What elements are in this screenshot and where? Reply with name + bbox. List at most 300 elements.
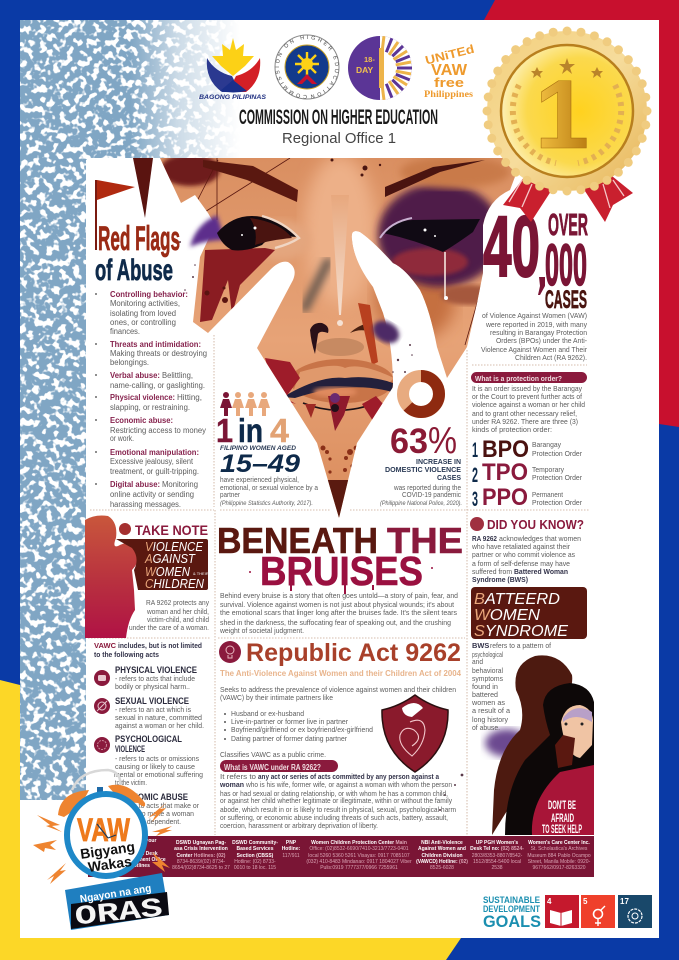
badge: VAW Bigyang Wakas clock: Wakas [87,853,133,875]
item: physical violence: PHYSICAL VIOLENCE [115,665,197,676]
hotline: report: Women's Desk [122,851,158,857]
logo: CHED seal: COMMISSION ON HIGHER EDUCATION [275,35,339,99]
banner: violence against women and children: AGAINST [144,552,196,566]
clock face [67,794,145,876]
hotline: NBI: NBI Anti-Violence [421,840,463,846]
laurel [513,85,621,163]
stat: 63% increase: % [428,420,457,462]
hotline: DSWD Community: DSWD Community- [232,840,278,846]
SDG 5 tile [581,895,615,928]
list of abuse types: name-calling, or gaslighting. [110,381,205,390]
badge: VAW Bigyang Wakas clock [33,770,172,933]
logo: 18-day campaign: DAY [356,65,373,75]
subheading: Regional Office 1 [282,130,396,147]
panel: Republic Act 9262: Classifies VAWC as a public crime. [220,750,326,759]
logo: United for VAW-free Philippines: Philippines [424,89,474,99]
icon: did you know [470,517,484,531]
intro paragraph: weight of societal judgment. [219,626,304,635]
item: psychological violence: PSYCHOLOGICAL [115,734,182,745]
hotline: UP PGH: 2803/8353-8807/8542- [472,853,523,859]
panel: Republic Act 9262: (VAWC) by their intimate partners like [220,693,333,702]
Ngayon na ang ORAS box: ORAS [74,894,164,933]
section: Red Flags of Abuse [95,158,207,509]
lip drips and blood [305,404,316,418]
logo: Bagong Pilipinas [199,38,267,101]
stat: 63% increase: INCREASE IN [416,457,461,466]
panel: what is a protection order: kinds of protection order: [472,425,552,434]
stat: over 40,000 cases [481,199,588,362]
panel: did you know: acknowledges that women [499,534,581,543]
panel: did you know [470,517,594,836]
left eyebrow [203,160,298,202]
order types: TPO [482,459,528,486]
lips [290,359,394,403]
hotline: Women's Care Center: Museum 884 Pablo Ocampo [527,853,591,859]
panel: Republic Act 9262: Seeks to address the prevalence of violence against women and their children [220,685,456,694]
stat: over 40,000 cases: Violence Against Women and Their [481,345,587,354]
list of abuse types: Digital abuse: [110,480,160,489]
organisation heading: COMMISSION ON HIGHER EDUCATION [239,106,438,129]
BWS wrapped text: found in [472,682,498,691]
scratches [190,158,478,345]
list of abuse types: Hitting, [177,393,202,402]
list of abuse types: ones, or controlling [110,318,176,327]
chin triangle [328,480,348,518]
hotline: DSWD Ugnayan: Center Hotlines: (02) [177,853,226,859]
stat: 63% increase: was reported during the [393,483,461,492]
hotline: DSWD Community: 0010 to 18 loc. 115 [234,865,276,871]
panel: take note VAWC: RA 9262 protects any [146,598,209,607]
clock bells [58,785,145,817]
logo: 18-day campaign [348,36,412,100]
logo: United for VAW-free Philippines [424,42,476,99]
item: psychological violence: VIOLENCE [115,744,145,755]
Ngayon na ang ORAS box: Ngayon na ang [79,882,152,906]
callout: don't be afraid: AFRAID [551,811,574,825]
list of abuse types: treatment, or guilt-tripping. [110,467,199,476]
order types: PPO [482,484,528,511]
list of partners: Husband or ex-husband [231,709,304,718]
item: physical violence: bodily or physical harm.. [115,682,190,691]
item: sexual violence: sexual in nature, committed [115,713,202,722]
order types [472,436,582,511]
partner logos row [199,34,476,101]
order types: BPO [482,436,529,463]
text: OVER [548,207,588,242]
list of abuse types: Monitoring [162,480,198,489]
hotline: DSWD Community: Section (CBSS) [237,853,274,859]
panel: take note VAWC [85,516,209,638]
SDG 17 tile: 17 [620,897,629,906]
list of abuse types: online activity or sending [110,490,194,499]
BWS wrapped text: BWS [472,641,489,650]
intro paragraph [219,591,458,635]
item: economic abuse: financially dependent. [115,817,181,826]
SDG 5 tile: 5 [583,897,588,906]
panel: acts of violence [94,641,204,826]
BWS wrapped text: behavioral [472,666,503,675]
item: psychological violence: causing or likely to cause [115,762,195,771]
badge: VAW Bigyang Wakas clock: VAW [77,812,131,848]
stat: 1 in 4 women: have experienced physical, [220,475,299,484]
item: economic abuse: - refers to acts that make or [115,801,199,810]
panel: what is a protection order [471,372,587,511]
intro paragraph: survival. Violence against women is not just about physical wounds; it's about [220,600,454,609]
text: 000 [545,233,587,298]
bruise beside nose [305,262,328,308]
badge: VAW Bigyang Wakas clock: Bigyang [79,838,136,862]
BWS wrapped text: symptoms [472,674,503,683]
hotline: NBI [416,840,468,871]
intro paragraph: the emotional scars that linger long after the bruises fade. It's the silent tears [220,608,457,617]
list of abuse types: Belittling, [162,371,193,380]
hotline: PNP: Hotline: [282,846,301,852]
item: sexual violence: SEXUAL VIOLENCE [115,696,189,707]
stat: 1 in 4 women: (Philippine Statistics Authority, 2017). [220,501,313,507]
BWS wrapped text: a result of a [472,706,511,715]
panel: what is a protection order: under RA 9262. There are three (3) [472,417,578,426]
hotline: Women's Care Center: St. Scholastica's Archives [531,846,588,852]
stat: over 40,000 cases: Children Act (RA 9262). [515,353,587,362]
list of partners: Dating partner of former dating partner [231,734,347,743]
stat: 63% increase: COVID-19 pandemic [402,490,461,499]
list of abuse types: Controlling behavior: [110,290,188,299]
list of partners: Live-in-partner or former live in partner [231,717,348,726]
list of abuse types: harassing messages. [110,500,181,509]
list of abuse types: belongings. [110,358,149,367]
Ngayon na ang ORAS box [65,873,169,933]
hotline: DSWD Community [232,840,278,871]
nostrils [310,323,328,354]
hotline: Women's Care Center: 9677662/0917-8263320 [532,865,586,871]
hotline: Women Children Protection Center: local 5260 5360 5261 Visayas: 0917 7085107 [308,853,410,859]
panel: acts of violence: includes, but is not limited [118,641,202,650]
order types: Permanent [532,490,563,499]
organisation heading [239,106,438,147]
stat: over 40,000 cases: 40 [483,199,540,295]
list of abuse types: Monitoring activities, [110,299,180,308]
hotline: NBI: Against Women and [418,846,466,852]
BWS wrapped text: battered [472,690,498,699]
item: psychological violence: - refers to acts or omissions [115,754,199,763]
speckled blue paint texture [20,20,240,810]
item: economic abuse [115,792,199,826]
stat: 1 in 4 women [216,392,319,507]
order types: Temporary [532,465,564,474]
item: physical violence [94,665,197,691]
item: economic abuse: ECONOMIC ABUSE [115,792,188,803]
logo: United for VAW-free Philippines: UNiTEd [424,42,476,68]
definition paragraph: or suffering, or economic abuse including threats of such acts, battery, assault, [220,813,448,822]
hotline: Women Children Protection Center [306,840,412,871]
SDG wordmark: DEVELOPMENT [483,904,540,915]
panel: did you know: a form of self-defense may have [472,559,570,568]
stat: 63% increase: (Philippine National Police, 2020). [380,501,462,507]
figure: 1 in 4 [216,412,290,449]
item: economic abuse: attempt to make a woman [115,809,194,818]
list of abuse types: isolating from loved [110,309,176,318]
icon: light bulb [219,641,241,663]
paint specks [179,241,463,811]
illustration: women silhouettes: TO SEEK HELP [542,822,582,836]
title: Beneath the Bruises: BRUISES [260,548,423,594]
definition paragraph: abode, which result in or is likely to result in physical, sexual, psychological harm [220,805,456,814]
hotline: Women Children Protection Center: Pulis:0919 7777377/0966 7255961 [320,865,398,871]
icon: red flag [95,180,135,250]
definition paragraph: It refers to [220,772,256,781]
order types: 3 [472,488,478,511]
figure: 1 in 4: 1 [216,412,233,449]
definition paragraph: has or had sexual or dating relationship, or with whom he has a common child, [220,789,448,798]
background: red top-right border [484,0,679,427]
hotline: DSWD Community: Hotline: (02) 8733- [234,859,276,865]
list of abuse types: Restricting access to money [110,426,206,435]
BWS wrapped text: psychological [472,650,503,659]
stat: 63% increase: DOMESTIC VIOLENCE [385,465,461,474]
BWS wrapped text: refers to a pattern of [490,641,552,650]
hotline: Women's Care Center: Street, Manila Mobile: 0920- [528,859,591,865]
definition paragraph: who is his wife, former wife, or against a woman with whom the person [245,780,452,789]
stat: 63% increase [380,376,462,507]
numeral 1: 1 [535,60,589,169]
sparks [33,802,172,884]
list of abuse types: or work. [110,434,134,443]
stat: 1 in 4 women: emotional, or sexual violence by a [220,483,319,492]
medal face [501,45,633,177]
illustration: bruised woman's face [150,150,530,811]
title: Beneath the Bruises [217,520,463,594]
panel: did you know: partner or who commit violence as [472,550,575,559]
stat: 1 in 4 women: FILIPINO WOMEN AGED [220,445,296,452]
title: Beneath the Bruises: BENEATH [217,520,378,561]
item: psychological violence [94,734,203,787]
order types: 1 [472,439,478,462]
pill heading: What is VAWC under RA 9262? [224,763,321,772]
icon: four women figures [220,392,270,416]
panel: acts of violence: VAWC [94,641,117,650]
list of abuse types [95,290,207,509]
medal ribbons [503,172,633,222]
list of abuse types: Threats and intimidation: [110,340,201,349]
hotline: PNP: PNP [286,840,297,846]
SDG wordmark: SUSTAINABLE [483,895,540,906]
definition paragraph: or against her child whether legitimate or illegitimate, within or without the family [220,796,452,805]
SDG 17 tile [618,895,652,928]
hotline: PNP: 117/911 [282,853,300,859]
BWS wrapped text [471,641,552,732]
BWS wrapped text: and [472,657,483,666]
item: psychological violence: mental or emotional suffering [114,770,203,779]
heading: of Abuse: of Abuse [95,254,173,287]
panel: what is a protection order: and to grant other necessary relief, [472,409,577,418]
list of abuse types: Physical violence: [110,393,175,402]
hotline: Women Children Protection Center: Women Children Protection Center Main [311,840,407,846]
panel: Republic Act 9262 [219,639,462,830]
order types: 2 [472,464,478,487]
intro paragraph: shed in the darkness, the suffocating fear of speaking out, and the crushing [220,618,451,627]
SDG wordmark [483,895,541,931]
definition paragraph [219,772,456,830]
hotline: DSWD Ugnayan: 8734-8639/(02) 8734- [177,859,226,865]
white content backing [88,158,659,838]
panel: take note VAWC: victim-child, and child [147,615,209,624]
background: yellow bottom-left border [0,680,461,960]
order types: Protection Order [532,449,582,458]
banner: battered women syndrome: BATTEERD [474,591,560,608]
item: sexual violence: - refers to an act which is [115,705,191,714]
hotline: DSWD Ugnayan: 8654/(02)8734-8625 to 27 [172,865,230,871]
purple bruise near nose [369,316,403,348]
hotline: Women's Care Center [527,840,591,871]
donut chart [403,376,439,412]
hotline: NBI: Children Division [421,853,463,859]
SDG 4 tile: 4 [547,897,552,906]
subheading: The Anti-Violence Against Women and their Children Act of 2004 [220,669,462,678]
hotline: report: to report your [124,838,156,844]
silhouette: mother and child [85,516,138,638]
footer: hotlines banner [88,836,594,877]
banner: violence against women and children: WOMEN [145,565,191,579]
hotline: UP PGH: UP PGH Women's [476,840,518,846]
hotline: UP PGH: 1512/8554-5400 local [473,859,521,865]
panel: did you know: RA 9262 [472,534,497,543]
right eye bruise [378,183,502,287]
title: Beneath the Bruises: THE [387,520,463,561]
logo: 18-day campaign: 18- [364,55,375,64]
item: psychological violence: to the victim. [115,778,147,787]
SDG 4 tile [545,895,579,928]
callout: don't be afraid [542,798,582,836]
panel: did you know: Syndrome (BWS) [472,575,528,584]
banner: violence against women and children [116,539,209,591]
list of abuse types: slapping, or restraining. [110,403,190,412]
panel: take note VAWC: woman and her child, [146,607,209,616]
pill heading: What is a protection order? [475,374,562,383]
definition paragraph: woman [219,780,244,789]
heading: Republic Act 9262 [246,639,461,667]
hotline: DSWD Ugnayan [172,840,230,871]
icon: shield with mother and child [382,695,448,772]
icon: take note [119,523,131,535]
heading: DID YOU KNOW? [487,518,584,532]
SDG wordmark: GOALS [483,912,541,931]
definition paragraph: any act or series of acts committed by any person against a [258,772,440,781]
heading: Red Flags: Red Flags [98,220,180,258]
stat: 1 in 4 women: partner [220,490,240,499]
panel: what is a protection order: violence against a woman or her child [472,400,585,409]
dotted dividers [88,335,590,840]
figure: 15-49: 15–49 [220,450,300,478]
list of partners: Boyfriend/girlfriend or ex boyfriend/ex-girlfriend [231,725,373,734]
figure: 1 in 4: 4 [270,412,290,449]
stat: over 40,000 cases: of Violence Against Women (VAW) [482,311,587,320]
left eye bleed [200,248,275,322]
nose highlight [331,195,349,315]
BWS wrapped text: long history [472,715,508,724]
decorative dark wedge [133,158,153,218]
stat: over 40,000 cases: Orders (BPOs) under the Anti- [496,336,587,345]
logo: United for VAW-free Philippines: free [434,75,464,90]
stat: over 40,000 cases: were reported in 2019, with many [485,320,587,329]
clock bell wire [72,770,120,790]
left eye [190,215,299,250]
list of abuse types: Verbal abuse: [110,371,160,380]
list of abuse types: Emotional manipulation: [110,448,199,457]
list of abuse types: Making threats or destroying [110,349,207,358]
stat: 63% increase: CASES [437,473,461,482]
banner: battered women syndrome: SYNDROME [474,623,568,640]
panel: did you know: suffered from [472,567,512,576]
text: CASES [545,286,587,314]
order types: Barangay [532,440,561,449]
hotline: Women Children Protection Center: Office: (02)8532-6690/7410-3213/7723-0401 [309,846,409,852]
banner: battered women syndrome: WOMEN [474,607,540,624]
definition paragraph: coercion, harassment or arbitrary deprivation of liberty. [220,821,378,830]
hotline: UP PGH [470,840,524,871]
SDG logo and goal tiles [483,895,652,931]
banner: violence against women and children: CHILDREN [145,577,205,591]
logo: United for VAW-free Philippines: VAW [431,62,468,79]
list of abuse types: Excessive jealousy, silent [110,457,194,466]
BWS wrapped text: of abuse. [472,723,500,732]
hotline: NBI: 8525-6028 [430,865,454,871]
heading: take note: TAKE NOTE [135,522,208,538]
item: physical violence: - refers to acts that include [115,674,195,683]
hotline: report: Hotlines [130,863,150,869]
hotline: Women Children Protection Center: (032) 410-8483 Mindanao: 0917 1804027 Viber [306,859,412,865]
hotline: report [114,838,166,869]
list of abuse types: finances. [110,327,140,336]
item: sexual violence: against a woman or her child. [115,721,204,730]
list of partners [224,709,373,743]
panel: what is a protection order: or the Court to prevent further acts of [472,392,583,401]
order types: Protection Order [532,473,582,482]
banner: violence against women and children: VIOLENCE [145,540,204,554]
BWS wrapped text: women as [471,698,505,707]
panel: take note VAWC: under the care of a woman. [129,623,209,632]
item: sexual violence [94,696,204,730]
hotline: PNP [282,840,301,859]
hotline: UP PGH: 2538 [491,865,503,871]
panel: did you know: who have retaliated against their [471,542,570,551]
gold medal with number 1 [487,31,647,222]
banner: violence against women and children: & THEIR [193,571,209,576]
figure: 63%: 63 [390,422,428,461]
right eye [380,218,480,300]
order types: Protection Order [532,498,582,507]
intro paragraph: Behind every bruise is a story that often goes untold—a story of pain, fear, and [220,591,458,600]
hotline: NBI: (VAWCD) Hotline: (02) [416,859,468,865]
hotline: DSWD Community: Based Services [237,846,274,852]
hotline: DSWD Ugnayan: asa Crisis Intervention [174,846,228,852]
hotline: Women's Care Center: Women's Care Center Inc. [528,840,590,846]
callout: don't be afraid: DON'T BE [548,798,576,812]
stat: over 40,000 cases: resulting in Barangay Protection [490,328,587,337]
panel: did you know: Battered Woman [514,567,568,576]
logo: Bagong Pilipinas: BAGONG PILIPINAS [199,94,267,101]
stars [531,58,603,78]
illustration: women silhouettes [485,655,594,836]
right eyebrow [385,160,485,197]
banner: battered women syndrome [471,587,587,640]
figure: 1 in 4: in [238,412,263,449]
medal scalloped rim [487,31,647,191]
list of abuse types: Economic abuse: [110,416,173,425]
panel: acts of violence: to the following acts [94,650,159,659]
hotline: DSWD Ugnayan: DSWD Ugnayan Pag- [176,840,226,846]
panel: what is a protection order: It is an order issued by the Barangay [472,384,582,393]
hotline: report: or Government Office [114,857,166,863]
